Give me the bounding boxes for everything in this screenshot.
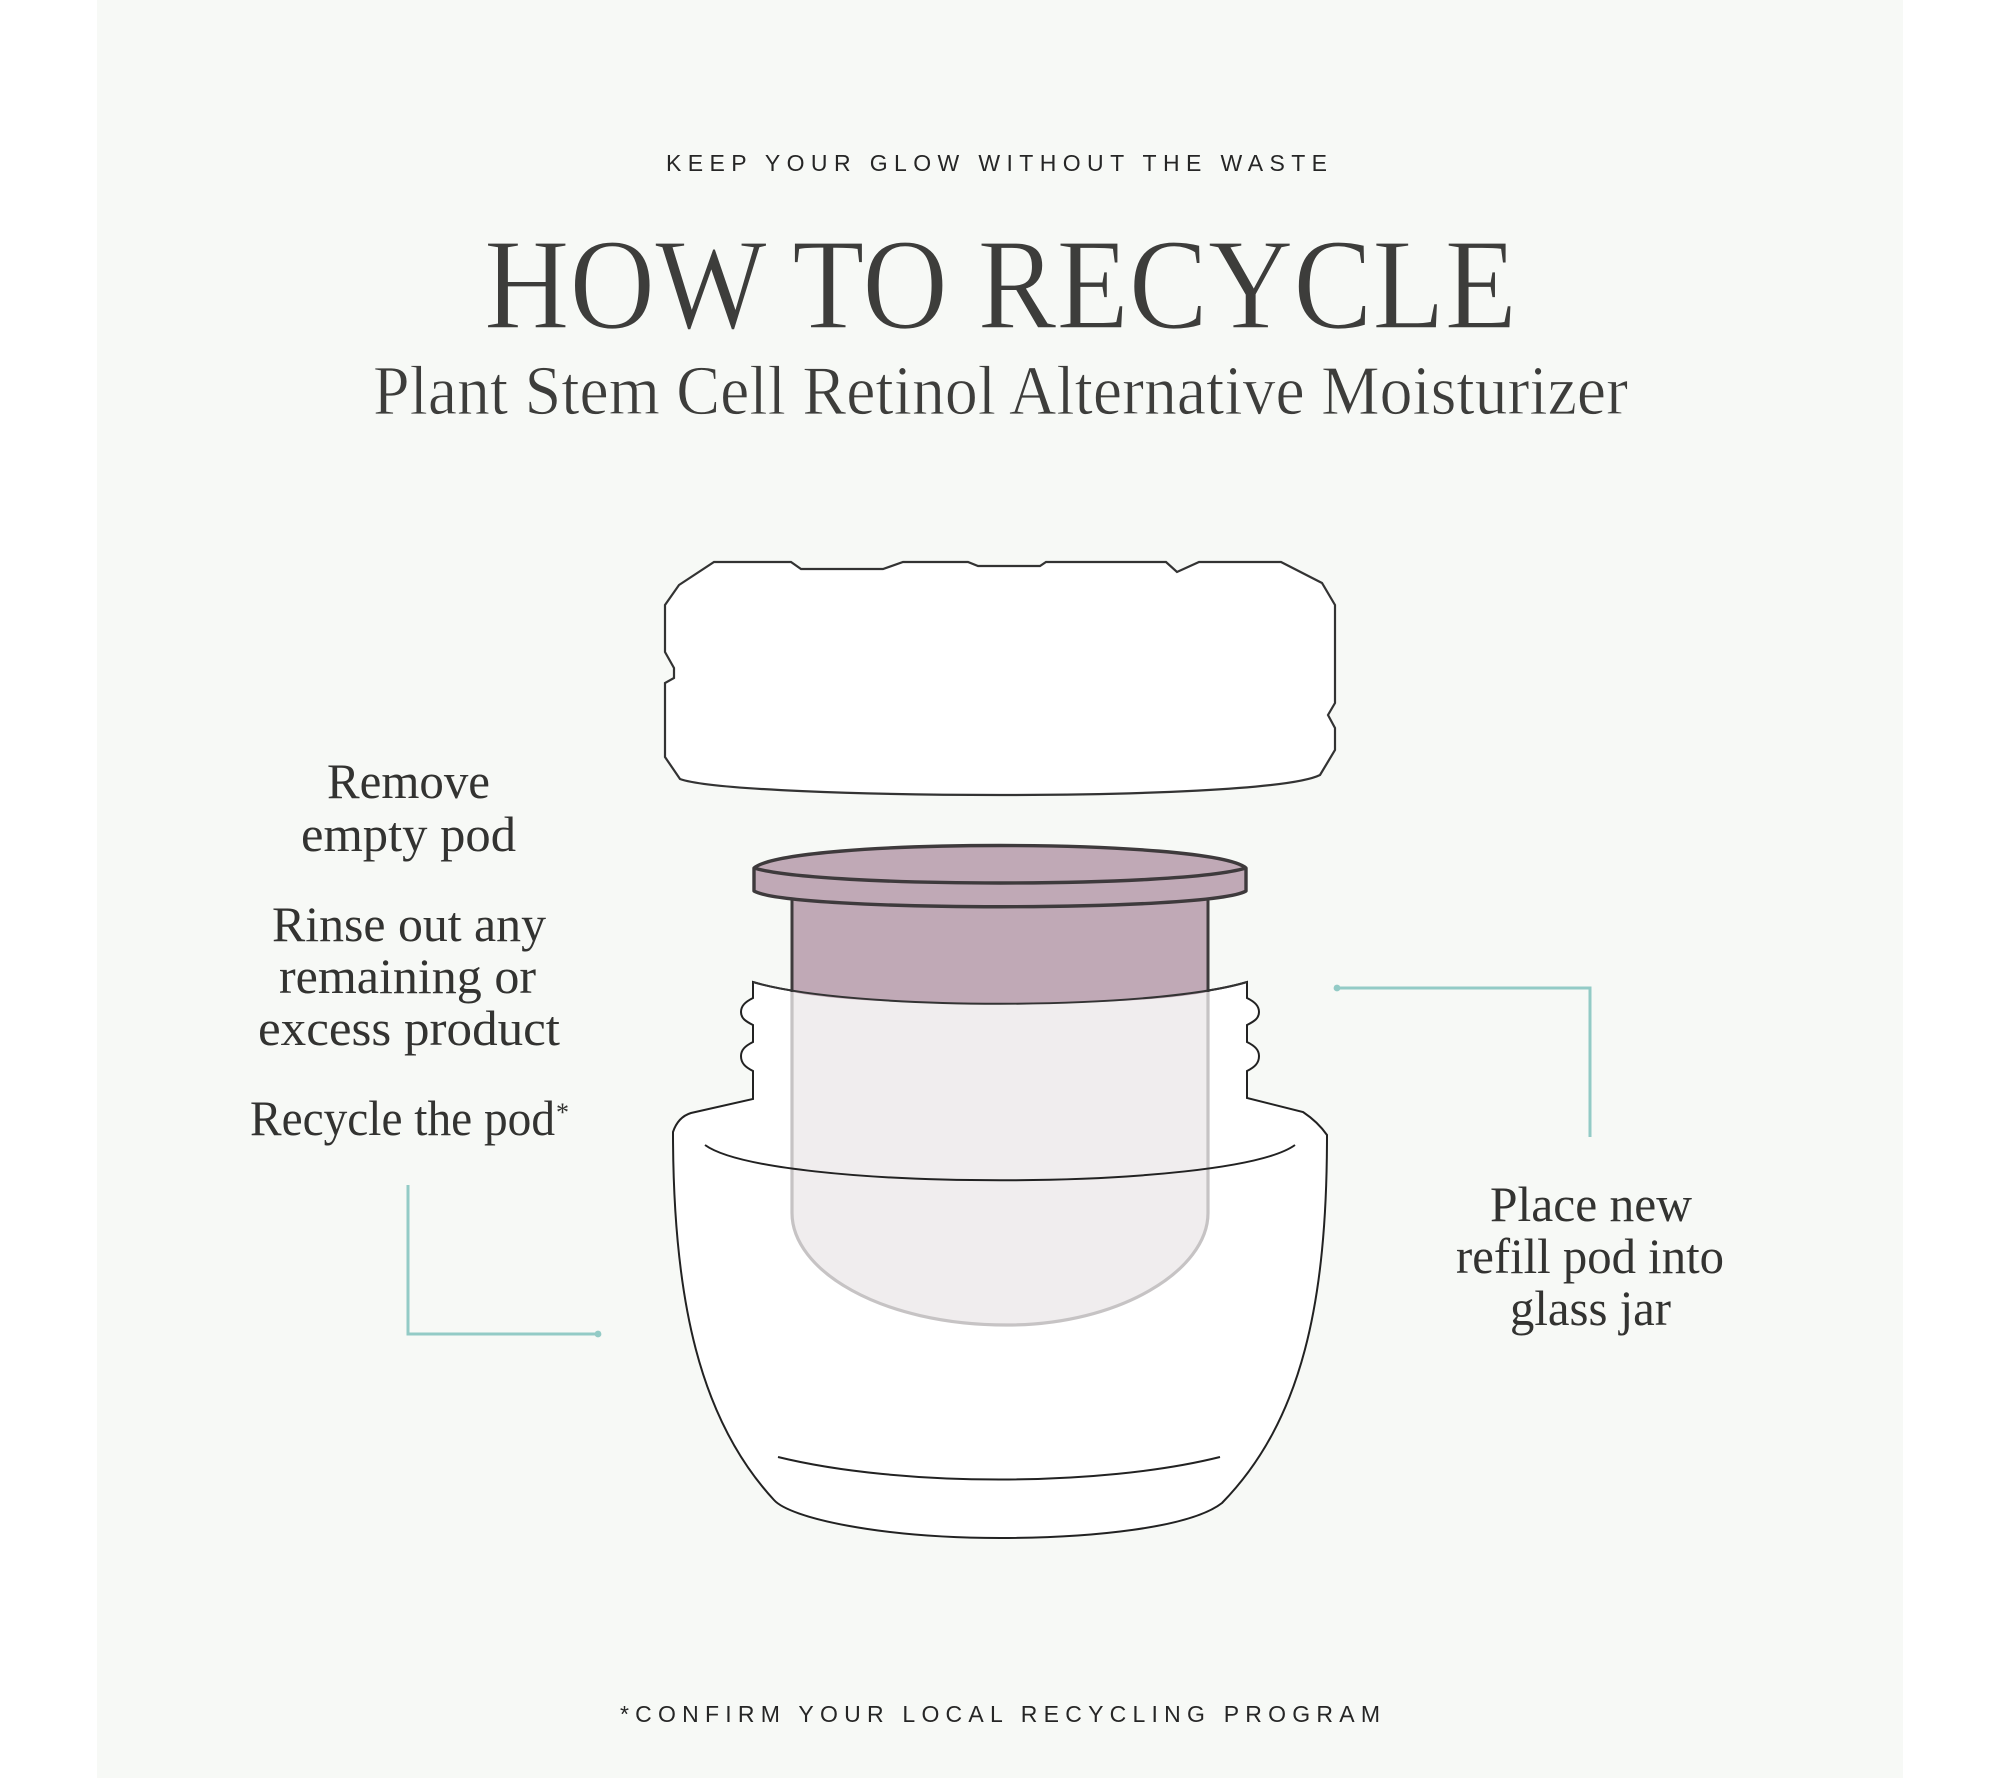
glass jar body: [673, 982, 1327, 1538]
step: remove: Remove: [327, 753, 490, 809]
footnote: *CONFIRM YOUR LOCAL RECYCLING PROGRAM: [620, 1701, 1380, 1727]
pod rim: [754, 846, 1246, 907]
eyebrow heading: KEEP YOUR GLOW WITHOUT THE WASTE: [666, 150, 1327, 176]
line 1: Place new: [1490, 1176, 1692, 1232]
line 2: refill pod into: [1456, 1228, 1724, 1284]
connector: left steps to jar: [408, 1185, 601, 1337]
pod seen through the jar: [792, 992, 1208, 1325]
jar base line: [778, 1457, 1220, 1480]
step: rinse line 3: excess product: [258, 1000, 560, 1056]
illustration: refill jar: [665, 562, 1335, 1538]
pod stem above the jar: [792, 900, 1208, 1004]
title: HOW TO RECYCLE: [484, 213, 1517, 357]
pod stem outline: [792, 900, 1208, 992]
step: rinse line 1: Rinse out any: [272, 896, 546, 952]
pod rim inner edge: [754, 868, 1246, 883]
connector: jar to right step: [1334, 985, 1590, 1137]
lid: [665, 562, 1335, 795]
subtitle: Plant Stem Cell Retinol Alternative Moisturizer: [373, 353, 1628, 430]
footnote asterisk: *: [556, 1098, 569, 1127]
text block: place new refill: [1456, 1176, 1724, 1336]
step: recycle: Recycle the pod: [250, 1090, 555, 1146]
line 3: glass jar: [1510, 1280, 1671, 1336]
jar rim front edge: [753, 982, 1247, 1004]
step: rinse line 2: remaining or: [279, 948, 536, 1004]
step: empty pod: empty pod: [301, 806, 516, 862]
jar shoulder line: [705, 1145, 1295, 1180]
text block: removal steps: [250, 753, 569, 1146]
